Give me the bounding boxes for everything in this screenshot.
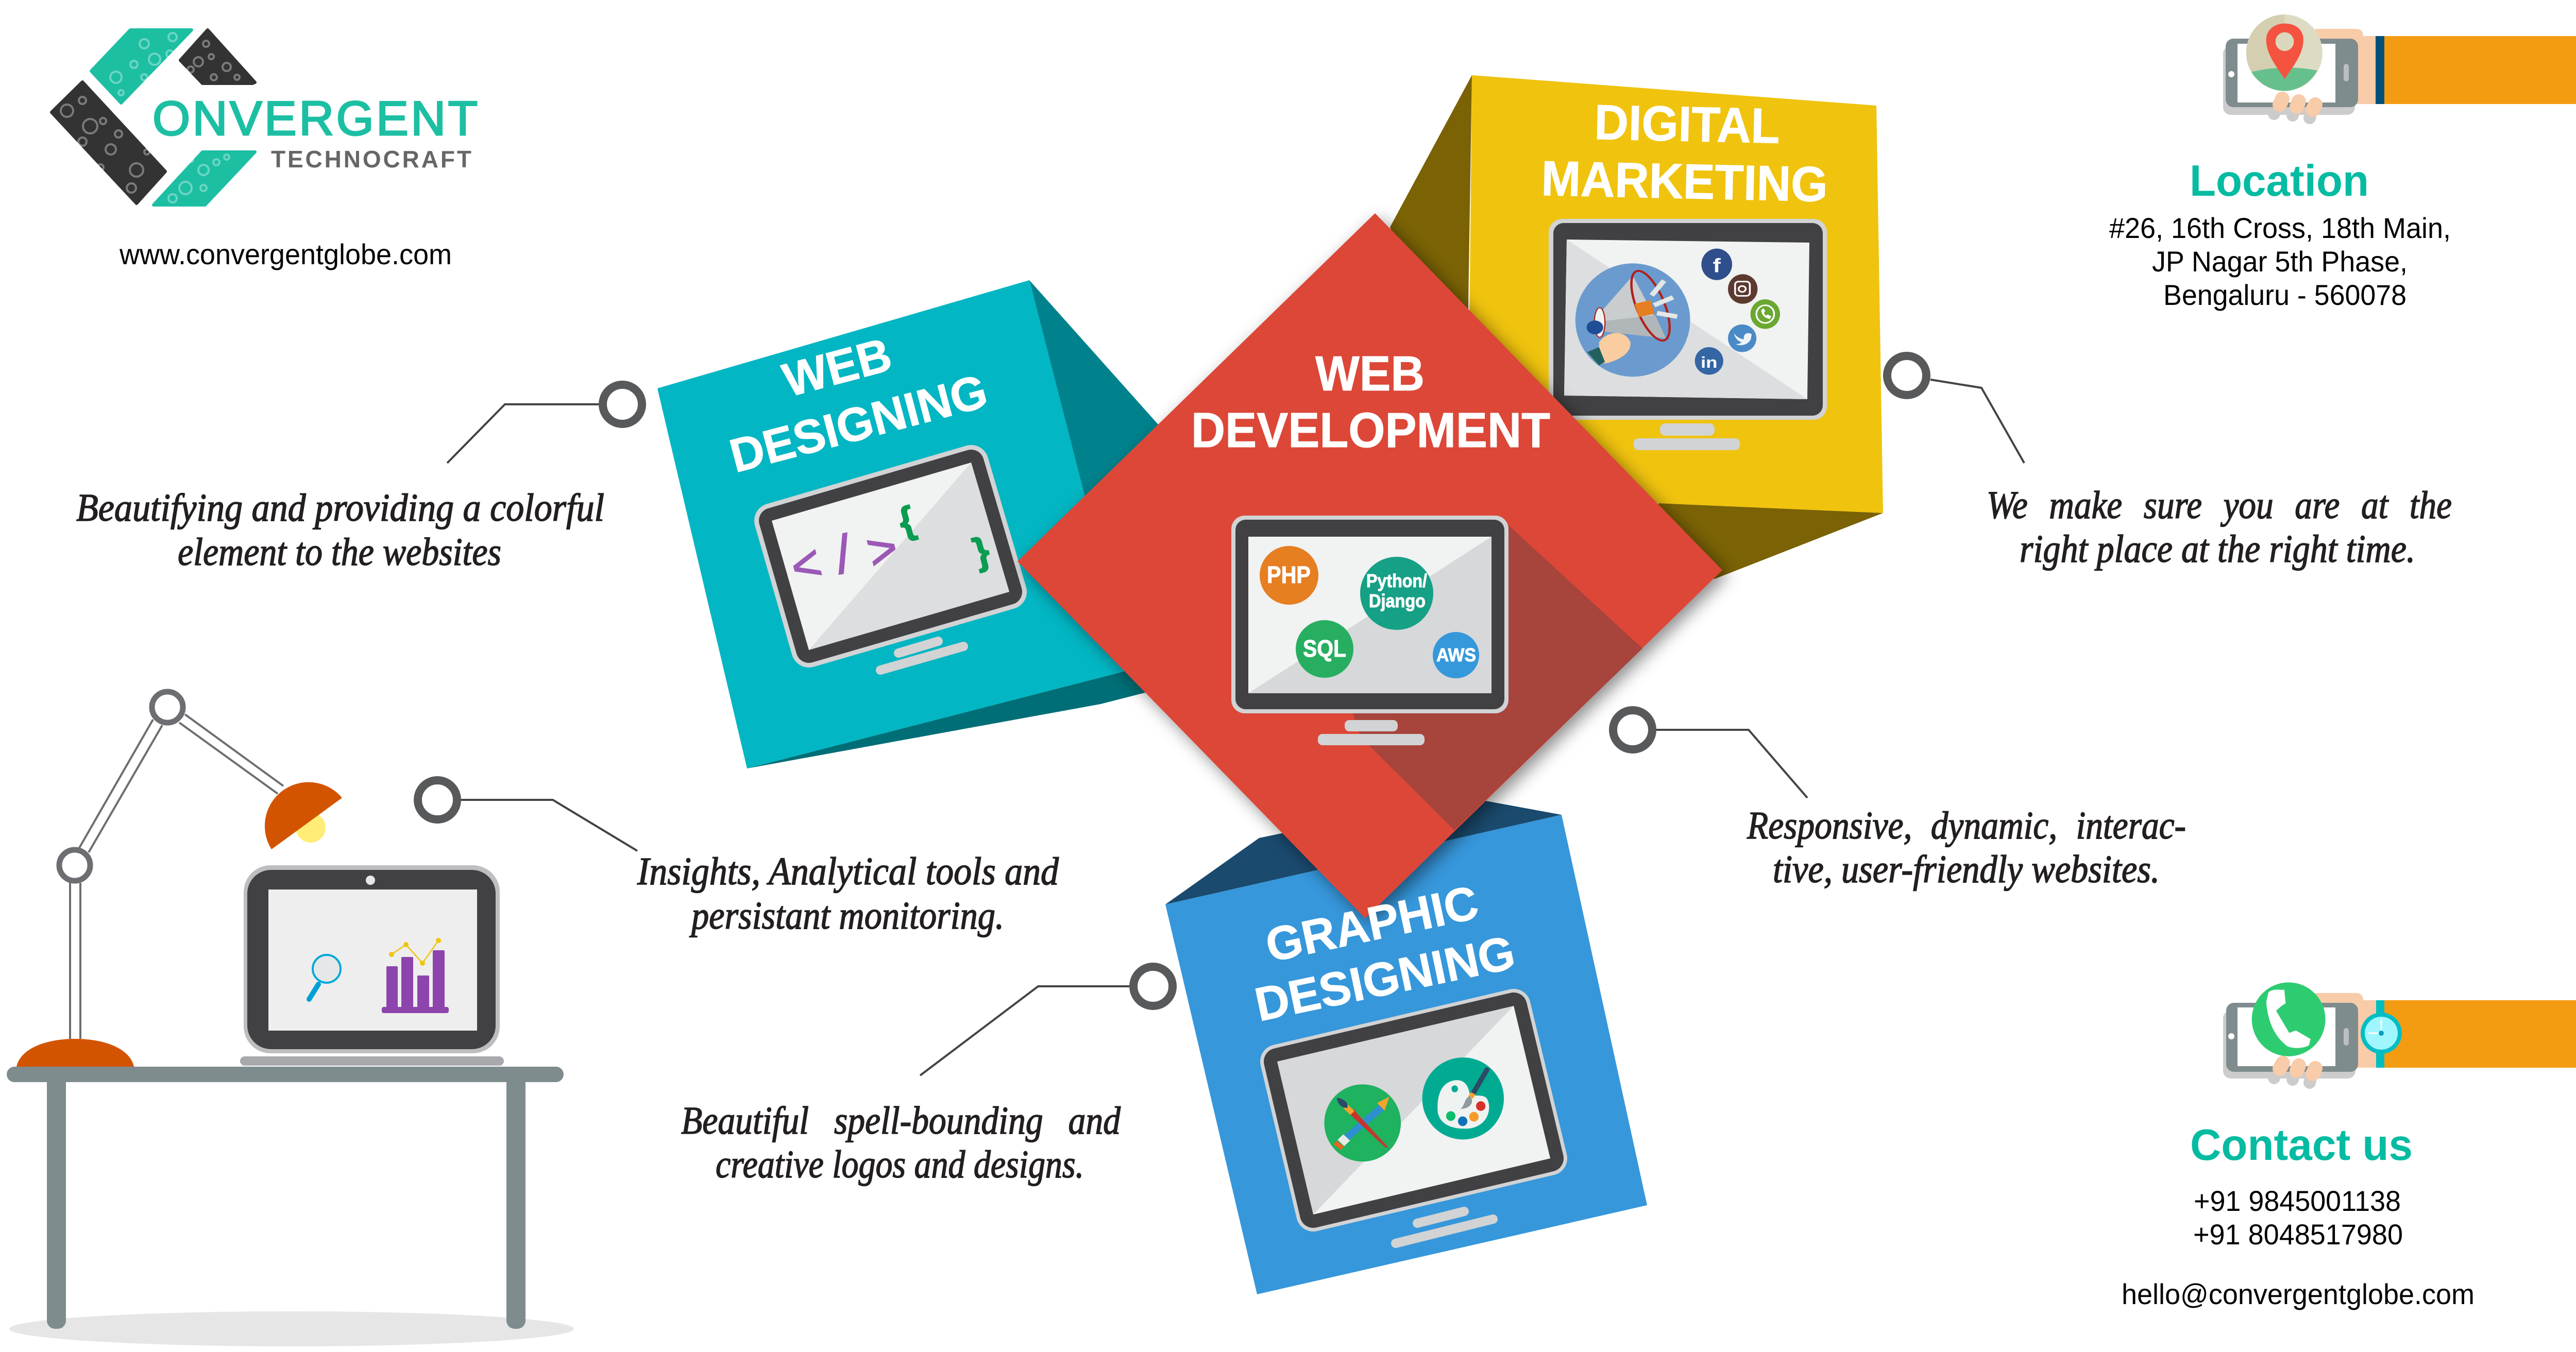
contact details: +91 8048517980 xyxy=(2193,1218,2403,1251)
card face xyxy=(1165,815,1647,1294)
hand xyxy=(2315,993,2376,1068)
tech badge: SQL: SQL xyxy=(1303,635,1346,662)
tech badge: AWS: AWS xyxy=(1436,644,1476,665)
code symbols on screen: < xyxy=(785,534,827,596)
tech badge: Python/Django: Python/ xyxy=(1366,570,1427,591)
heading: web development: WEB xyxy=(1315,346,1425,401)
panel: web development diamond xyxy=(1018,213,1722,918)
callout: digital marketing: right place at the right time. xyxy=(2020,527,2415,571)
diamond face xyxy=(1018,213,1722,918)
location heading: Location xyxy=(2190,157,2369,206)
location address: #26, 16th Cross, 18th Main, xyxy=(2109,212,2451,244)
icons: megaphone and social media xyxy=(1575,249,1780,376)
location address xyxy=(2109,212,2451,311)
icon: painter's palette xyxy=(1422,1057,1504,1139)
code symbols on screen: } xyxy=(969,528,994,574)
monitor: web development xyxy=(1231,516,1509,745)
code symbols on screen: > xyxy=(861,518,904,580)
callout: web development: Responsive, dynamic, interac- xyxy=(1747,804,2186,847)
heading: web development: DEVELOPMENT xyxy=(1191,403,1550,458)
wrist band xyxy=(2376,1000,2384,1068)
callout: web designing xyxy=(76,385,642,574)
icon: crossed pencil and brush xyxy=(1324,1084,1401,1161)
callout: analytics: persistant monitoring. xyxy=(689,894,1004,937)
callout: digital marketing xyxy=(1887,356,2452,571)
panel: digital marketing card xyxy=(1390,75,1883,579)
code symbols on screen: / xyxy=(831,524,856,586)
heading: digital marketing xyxy=(1541,95,1828,212)
logo: Convergent Technocraft xyxy=(52,30,478,205)
icon: linkedin xyxy=(1695,347,1723,375)
sleeve xyxy=(2384,1000,2576,1068)
callout: web designing: element to the websites xyxy=(178,530,501,574)
callout: graphic designing: creative logos and designs. xyxy=(716,1143,1084,1186)
contact details: hello@convergentglobe.com xyxy=(2122,1278,2475,1310)
icon: call handset xyxy=(2252,982,2326,1056)
laptop xyxy=(240,865,504,1066)
icon: watch xyxy=(2363,1015,2400,1052)
code symbols on screen xyxy=(785,498,994,596)
tech badge: SQL xyxy=(1296,620,1353,678)
icon: instagram xyxy=(1728,274,1757,304)
icon: whatsapp xyxy=(1751,299,1780,329)
callout: analytics xyxy=(418,780,1059,937)
sleeve xyxy=(2384,36,2576,104)
logo tagline: TECHNOCRAFT xyxy=(271,146,471,173)
phone xyxy=(2223,39,2358,118)
phone xyxy=(2223,1003,2358,1083)
card side top xyxy=(1029,280,1185,670)
illustration: hand holding phone with call icon xyxy=(2223,982,2576,1083)
heading: graphic designing xyxy=(1250,876,1519,1032)
location address: JP Nagar 5th Phase, xyxy=(2152,245,2408,278)
contact details xyxy=(2122,1185,2475,1310)
icon: linkedin: in xyxy=(1701,354,1718,371)
tech badge: AWS xyxy=(1433,632,1479,678)
contact details: +91 9845001138 xyxy=(2194,1185,2401,1217)
card side bottom xyxy=(1649,503,1883,579)
website url: www.convergentglobe.com xyxy=(119,238,452,270)
callout: web development: tive, user-friendly websites. xyxy=(1773,848,2160,891)
hand xyxy=(2315,29,2376,104)
code symbols on screen: { xyxy=(894,498,919,543)
contact heading: Contact us xyxy=(2190,1121,2413,1170)
panel: web designing card xyxy=(657,280,1185,768)
callout: web designing: Beautifying and providing a colorful xyxy=(76,486,604,529)
bar chart xyxy=(382,938,449,1013)
icon: facebook xyxy=(1701,249,1732,280)
callout: web development xyxy=(1613,710,2186,891)
card side left xyxy=(1390,75,1472,361)
location address: Bengaluru - 560078 xyxy=(2163,279,2406,311)
tech badge: PHP xyxy=(1260,546,1318,605)
heading: graphic designing: DESIGNING xyxy=(1250,926,1519,1032)
card face xyxy=(657,280,1129,768)
heading: digital marketing: DIGITAL xyxy=(1594,95,1781,154)
monitor: graphic designing xyxy=(1277,1006,1550,1243)
icon: megaphone xyxy=(1575,263,1690,376)
fingers xyxy=(2280,99,2315,110)
icon: twitter xyxy=(1728,324,1756,352)
heading: digital marketing: MARKETING xyxy=(1541,151,1828,212)
icon: facebook: f xyxy=(1713,254,1721,277)
monitor: digital marketing xyxy=(1549,219,1827,450)
icon: magnifier xyxy=(309,955,341,999)
heading: web development xyxy=(1191,346,1550,458)
illustration: desk with lamp and laptop xyxy=(7,692,574,1346)
icon: location pin xyxy=(2246,14,2323,91)
panel: graphic designing card xyxy=(1165,788,1647,1294)
desk xyxy=(7,1067,564,1329)
heading: web designing: DESIGNING xyxy=(724,365,993,483)
floor shadow xyxy=(9,1311,574,1346)
tech badge: PHP: PHP xyxy=(1267,561,1311,588)
logo mark xyxy=(52,30,255,205)
heading: graphic designing: GRAPHIC xyxy=(1261,876,1483,972)
callout: graphic designing: Beautiful spell-bounding and xyxy=(681,1099,1121,1142)
monitor: web designing xyxy=(772,463,1009,670)
callout: digital marketing: We make sure you are at the xyxy=(1987,484,2452,527)
tech badge: Python/Django xyxy=(1360,557,1433,630)
tech badge: Python/Django: Django xyxy=(1369,590,1426,611)
card side top xyxy=(1165,788,1562,904)
icons: design tools xyxy=(1324,1057,1504,1161)
card side bottom xyxy=(747,670,1185,768)
callout: analytics: Insights, Analytical tools and xyxy=(637,850,1059,893)
illustration: hand holding phone with location pin xyxy=(2223,14,2576,118)
cuff xyxy=(2376,36,2384,104)
card face xyxy=(1468,75,1883,513)
lamp xyxy=(16,692,342,1067)
heading: web designing: WEB xyxy=(777,328,897,407)
diamond long shadow xyxy=(1340,524,1642,830)
fingers xyxy=(2280,1063,2315,1074)
logo wordmark: ONVERGENT xyxy=(152,91,478,145)
callout: graphic designing xyxy=(681,967,1173,1186)
